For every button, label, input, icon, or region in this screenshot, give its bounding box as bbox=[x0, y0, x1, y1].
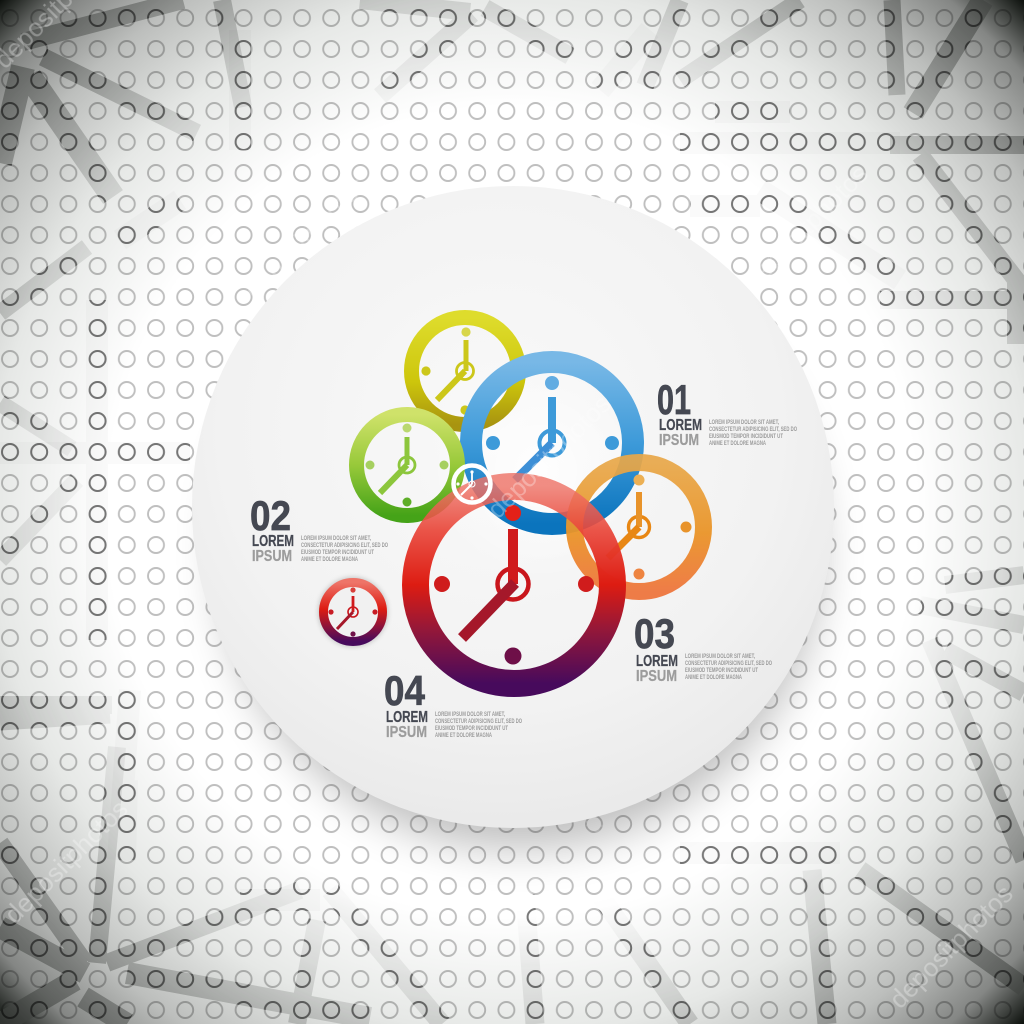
label 03: ANIME ET DOLORE MAGNA bbox=[685, 675, 742, 681]
watermark text on background: depositphotos bbox=[738, 159, 874, 294]
label 02: LOREM IPSUM DOLOR SIT AMET, bbox=[301, 536, 371, 542]
watermark text on background: depositphotos bbox=[238, 169, 374, 304]
label 01: 01 bbox=[657, 376, 691, 423]
label 04: ANIME ET DOLORE MAGNA bbox=[435, 733, 492, 739]
label 02: ANIME ET DOLORE MAGNA bbox=[301, 557, 358, 563]
label 01: CONSECTETUR ADIPISICING ELIT, SED DO bbox=[709, 427, 797, 433]
label 03: EIUSMOD TEMPOR INCIDIDUNT UT bbox=[685, 668, 758, 674]
label 04: 04 bbox=[384, 667, 426, 714]
label 03: 03 bbox=[634, 610, 675, 657]
clock: large red (04) bbox=[416, 486, 612, 684]
label 04: LOREM bbox=[386, 709, 428, 726]
label 04: CONSECTETUR ADIPISICING ELIT, SED DO bbox=[435, 719, 522, 725]
label 03 bbox=[634, 610, 772, 685]
icon: small red clock bbox=[319, 578, 387, 646]
label 03: LOREM IPSUM DOLOR SIT AMET, bbox=[685, 654, 755, 660]
clock: green (02) bbox=[356, 414, 458, 516]
watermark text on background: depositphotos bbox=[883, 879, 1019, 1014]
label 01: LOREM bbox=[659, 417, 702, 434]
label 03: CONSECTETUR ADIPISICING ELIT, SED DO bbox=[685, 661, 772, 667]
shadow under sphere bbox=[220, 256, 820, 848]
panel: white sphere bbox=[192, 186, 834, 828]
label 04: EIUSMOD TEMPOR INCIDIDUNT UT bbox=[435, 726, 508, 732]
watermark on clocks: depositphotos bbox=[481, 389, 617, 524]
clock: blue (01) bbox=[471, 362, 633, 524]
label 01: LOREM IPSUM DOLOR SIT AMET, bbox=[709, 420, 779, 426]
label 01 bbox=[657, 376, 797, 449]
watermark text on background: depositphotos bbox=[488, 794, 624, 929]
label 02: 02 bbox=[250, 492, 291, 539]
label 02 bbox=[250, 492, 388, 565]
label 01: IPSUM bbox=[659, 432, 699, 449]
clock: yellow bbox=[412, 318, 518, 424]
clock glow bbox=[430, 360, 650, 580]
clock: orange (03) bbox=[574, 462, 704, 592]
icon: small white clock bbox=[454, 466, 490, 502]
label 03: LOREM bbox=[636, 653, 678, 670]
label 02: LOREM bbox=[252, 533, 294, 550]
label 03: IPSUM bbox=[636, 668, 677, 685]
watermark text on background: depositphotos bbox=[0, 794, 134, 929]
label 01: EIUSMOD TEMPOR INCIDIDUNT UT bbox=[709, 434, 783, 440]
label 04: LOREM IPSUM DOLOR SIT AMET, bbox=[435, 712, 505, 718]
label 04 bbox=[384, 667, 522, 741]
label 04: IPSUM bbox=[386, 724, 427, 741]
label 02: IPSUM bbox=[252, 548, 292, 565]
label 01: ANIME ET DOLORE MAGNA bbox=[709, 441, 766, 447]
label 02: CONSECTETUR ADIPISICING ELIT, SED DO bbox=[301, 543, 388, 549]
label 02: EIUSMOD TEMPOR INCIDIDUNT UT bbox=[301, 550, 374, 556]
